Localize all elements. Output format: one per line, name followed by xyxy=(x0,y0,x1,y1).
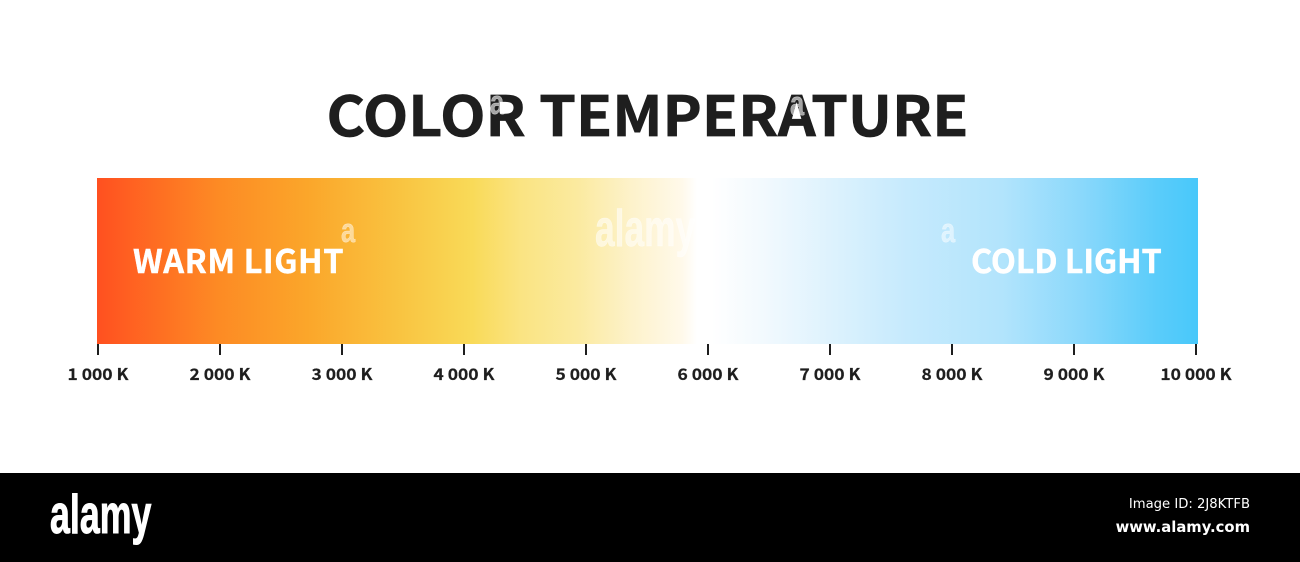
gradient bar xyxy=(97,178,1198,344)
label: cold light: COLD LIGHT xyxy=(971,236,1162,283)
label: warm light: WARM LIGHT xyxy=(133,236,344,283)
axis scale: 8 000 K xyxy=(921,361,983,385)
axis scale: 3 000 K xyxy=(311,361,373,385)
website: www.alamy.com xyxy=(1116,519,1250,536)
axis scale xyxy=(67,344,1232,385)
watermark over title R: a xyxy=(490,84,504,122)
axis scale: 10 000 K xyxy=(1160,361,1232,385)
axis scale: 9 000 K xyxy=(1043,361,1105,385)
axis scale: 4 000 K xyxy=(433,361,495,385)
axis scale: 1 000 K xyxy=(67,361,129,385)
axis scale: 6 000 K xyxy=(677,361,739,385)
axis scale: 5 000 K xyxy=(555,361,617,385)
watermark on bar centre: alamy xyxy=(595,200,695,258)
watermark over title A: a xyxy=(790,85,804,123)
axis scale: 7 000 K xyxy=(799,361,861,385)
watermark on bar right: a xyxy=(941,212,955,250)
logo: alamy xyxy=(50,483,151,545)
image id: Image ID: 2J8KTFB xyxy=(1129,497,1250,512)
watermark on bar left: a xyxy=(341,212,355,250)
footer band xyxy=(0,473,1300,562)
axis scale: 2 000 K xyxy=(189,361,251,385)
title: COLOR TEMPERATURE xyxy=(326,72,969,152)
